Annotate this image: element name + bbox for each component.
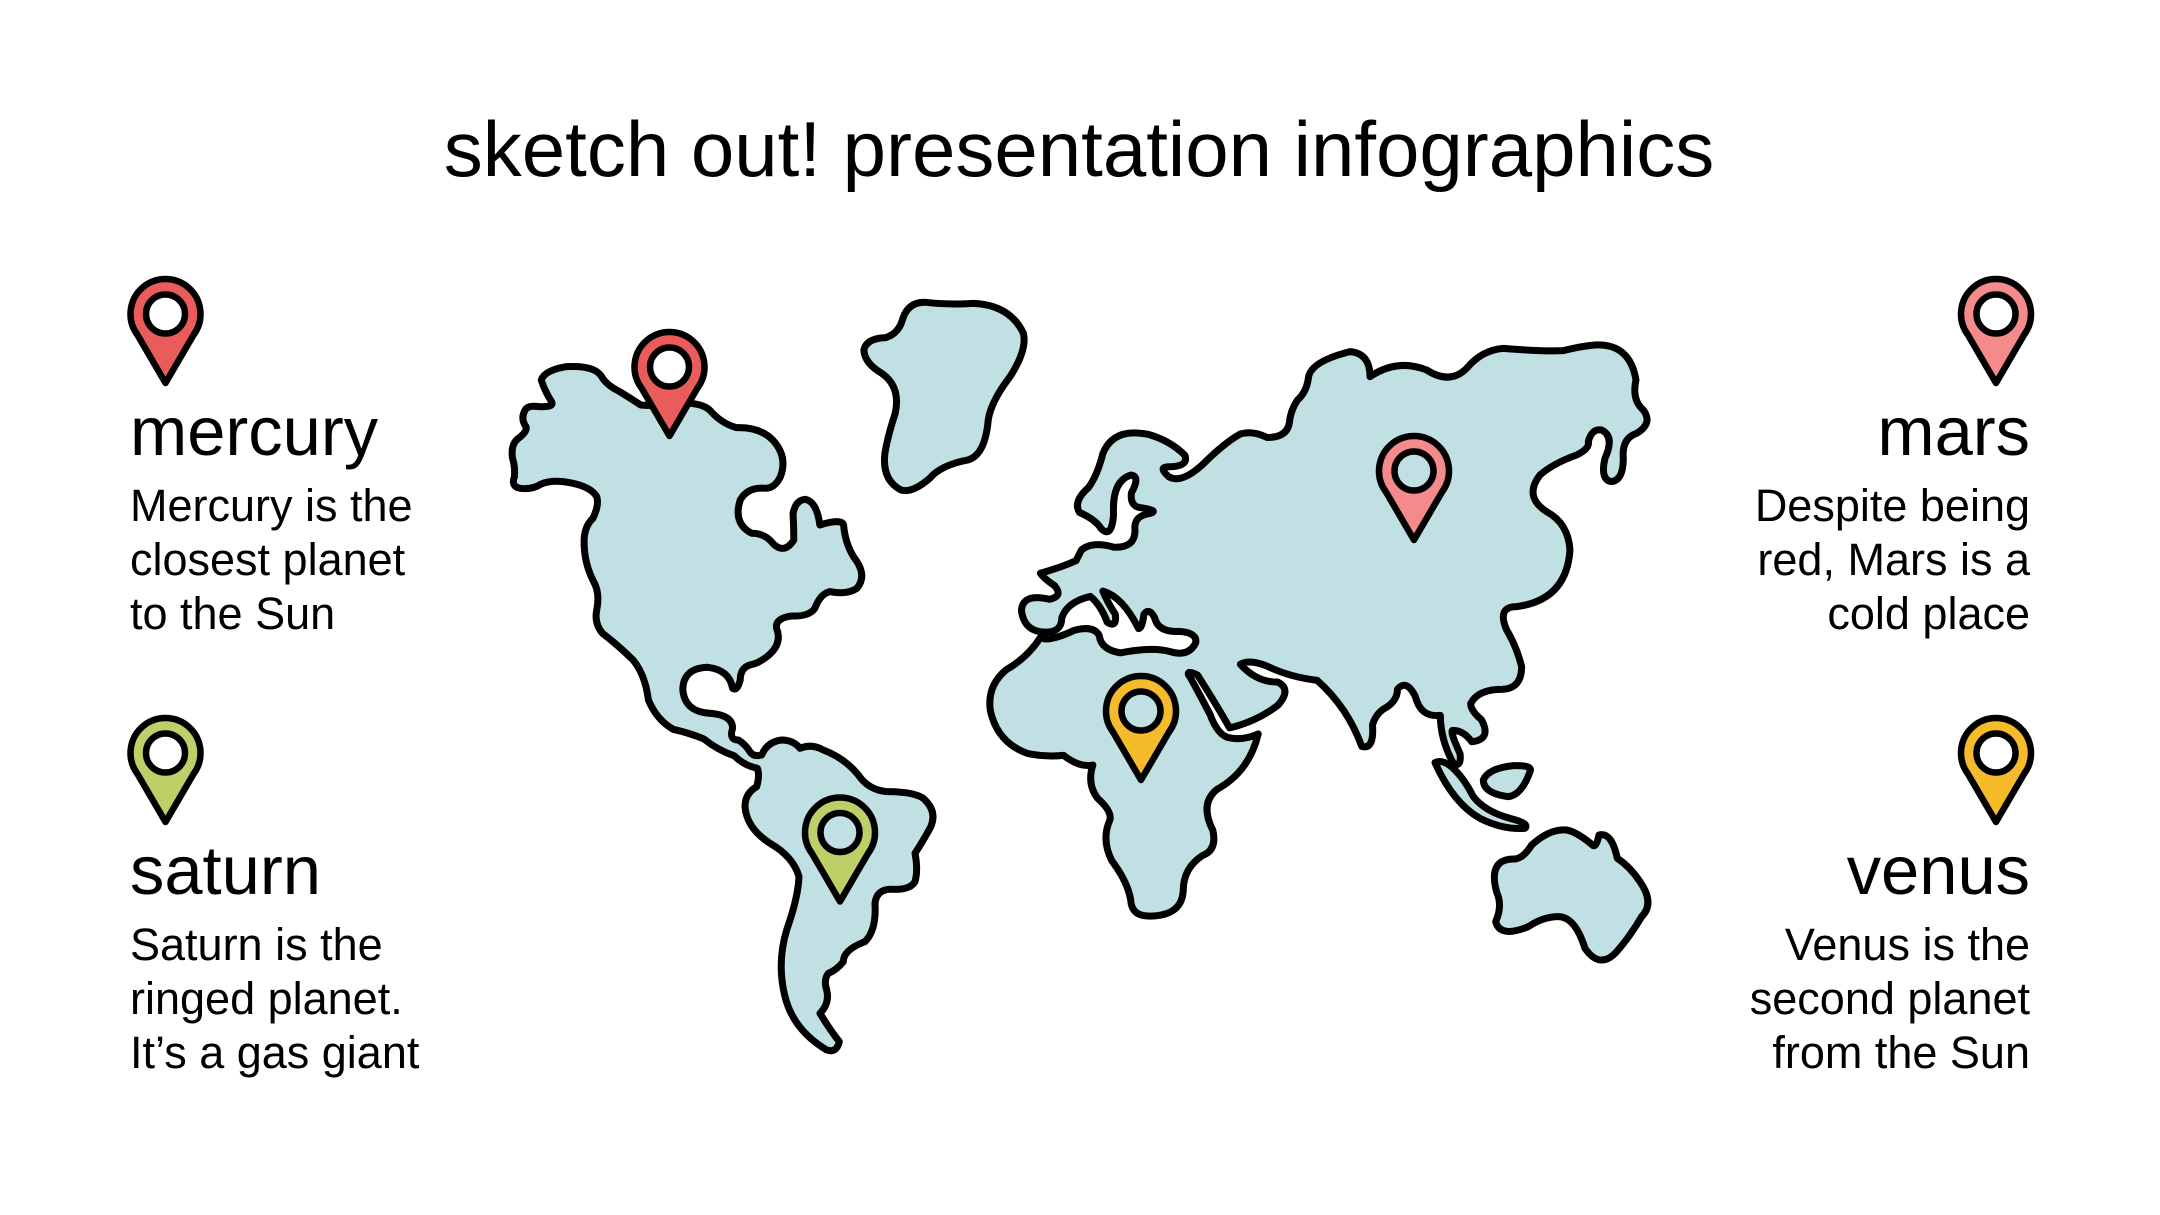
icon: saturn pin [130,718,200,822]
continent: Greenland [864,302,1024,491]
heading: venus: venus [1847,832,2030,909]
heading: mercury: mercury [130,393,379,470]
text: mercury description: to the Sun [130,588,335,639]
island: Borneo [1483,766,1530,797]
text: mercury description: Mercury is the [130,480,413,531]
title: sketch out! presentation infographics [444,105,1714,193]
icon: mercury pin [130,279,200,383]
map pin: mars [1379,436,1449,540]
continent: Europe, Africa and West Asia [990,400,1503,916]
text: mars description: red, Mars is a [1757,534,2031,585]
text: mars description: Despite being [1755,480,2030,531]
panel: venus [1750,718,2031,1078]
panel: mercury [130,279,413,639]
text: saturn description: Saturn is the [130,919,383,970]
continent: North America [512,366,862,768]
text: mars description: cold place [1827,588,2030,639]
icon: venus pin [1961,718,2031,822]
icon: mars pin [1961,279,2031,383]
continent: East Asia [1298,345,1647,689]
heading: mars: mars [1877,393,2030,470]
text: saturn description: It’s a gas giant [130,1027,420,1078]
panel: mars [1755,279,2031,639]
seam cover between Eurasia segments [1300,404,1500,686]
island: Sumatra and Java [1435,761,1526,829]
text: venus description: Venus is the [1785,919,2030,970]
map pin: saturn [805,798,875,902]
heading: saturn: saturn [130,832,321,909]
text: mercury description: closest planet [130,534,406,585]
text: saturn description: ringed planet. [130,973,403,1024]
continent: South America [745,740,933,1051]
map pin: venus [1106,676,1176,780]
panel: saturn [130,718,420,1078]
text: venus description: from the Sun [1772,1027,2030,1078]
world map [512,302,1648,1051]
map pin: mercury [634,332,704,436]
text: venus description: second planet [1750,973,2030,1024]
continent: Australia [1494,830,1648,960]
